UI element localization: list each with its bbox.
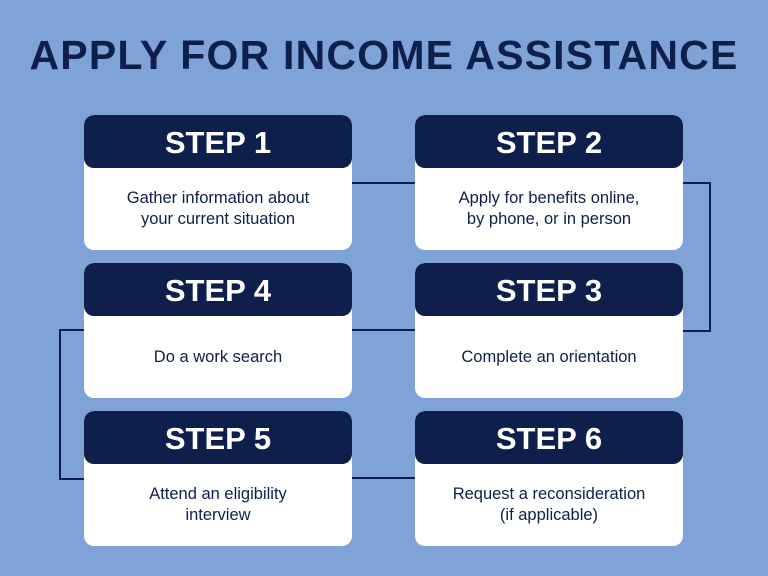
card: step 5 [84, 411, 352, 546]
card: step 5: STEP 5 [165, 421, 271, 456]
connector: step 3 to 4 [352, 329, 415, 331]
card: step 1: STEP 1 [165, 125, 271, 160]
title: APPLY FOR INCOME ASSISTANCE [30, 32, 738, 78]
connector: step 2 to 3 [683, 182, 711, 332]
card: step 2 [415, 115, 683, 250]
card: step 3 [415, 263, 683, 398]
connector: step 5 to 6 [352, 477, 415, 479]
card: step 3: Complete an orientation [461, 348, 637, 366]
card: step 5: interview [185, 506, 251, 524]
card: step 2: by phone, or in person [467, 210, 631, 228]
connector: step 1 to 2 [352, 182, 415, 184]
card: step 6: STEP 6 [496, 421, 602, 456]
card: step 6: (if applicable) [500, 506, 598, 524]
card: step 5: Attend an eligibility [149, 485, 287, 503]
card: step 2: STEP 2 [496, 125, 602, 160]
card: step 4: Do a work search [154, 348, 282, 366]
connector: step 4 to 5 [59, 329, 84, 480]
card: step 3: STEP 3 [496, 273, 602, 308]
card: step 1 [84, 115, 352, 250]
card: step 6: Request a reconsideration [453, 485, 645, 503]
card: step 2: Apply for benefits online, [459, 189, 639, 207]
card: step 4 [84, 263, 352, 398]
card: step 1: your current situation [141, 210, 295, 228]
card: step 1: Gather information about [127, 189, 309, 207]
card: step 4: STEP 4 [165, 273, 271, 308]
card: step 6 [415, 411, 683, 546]
